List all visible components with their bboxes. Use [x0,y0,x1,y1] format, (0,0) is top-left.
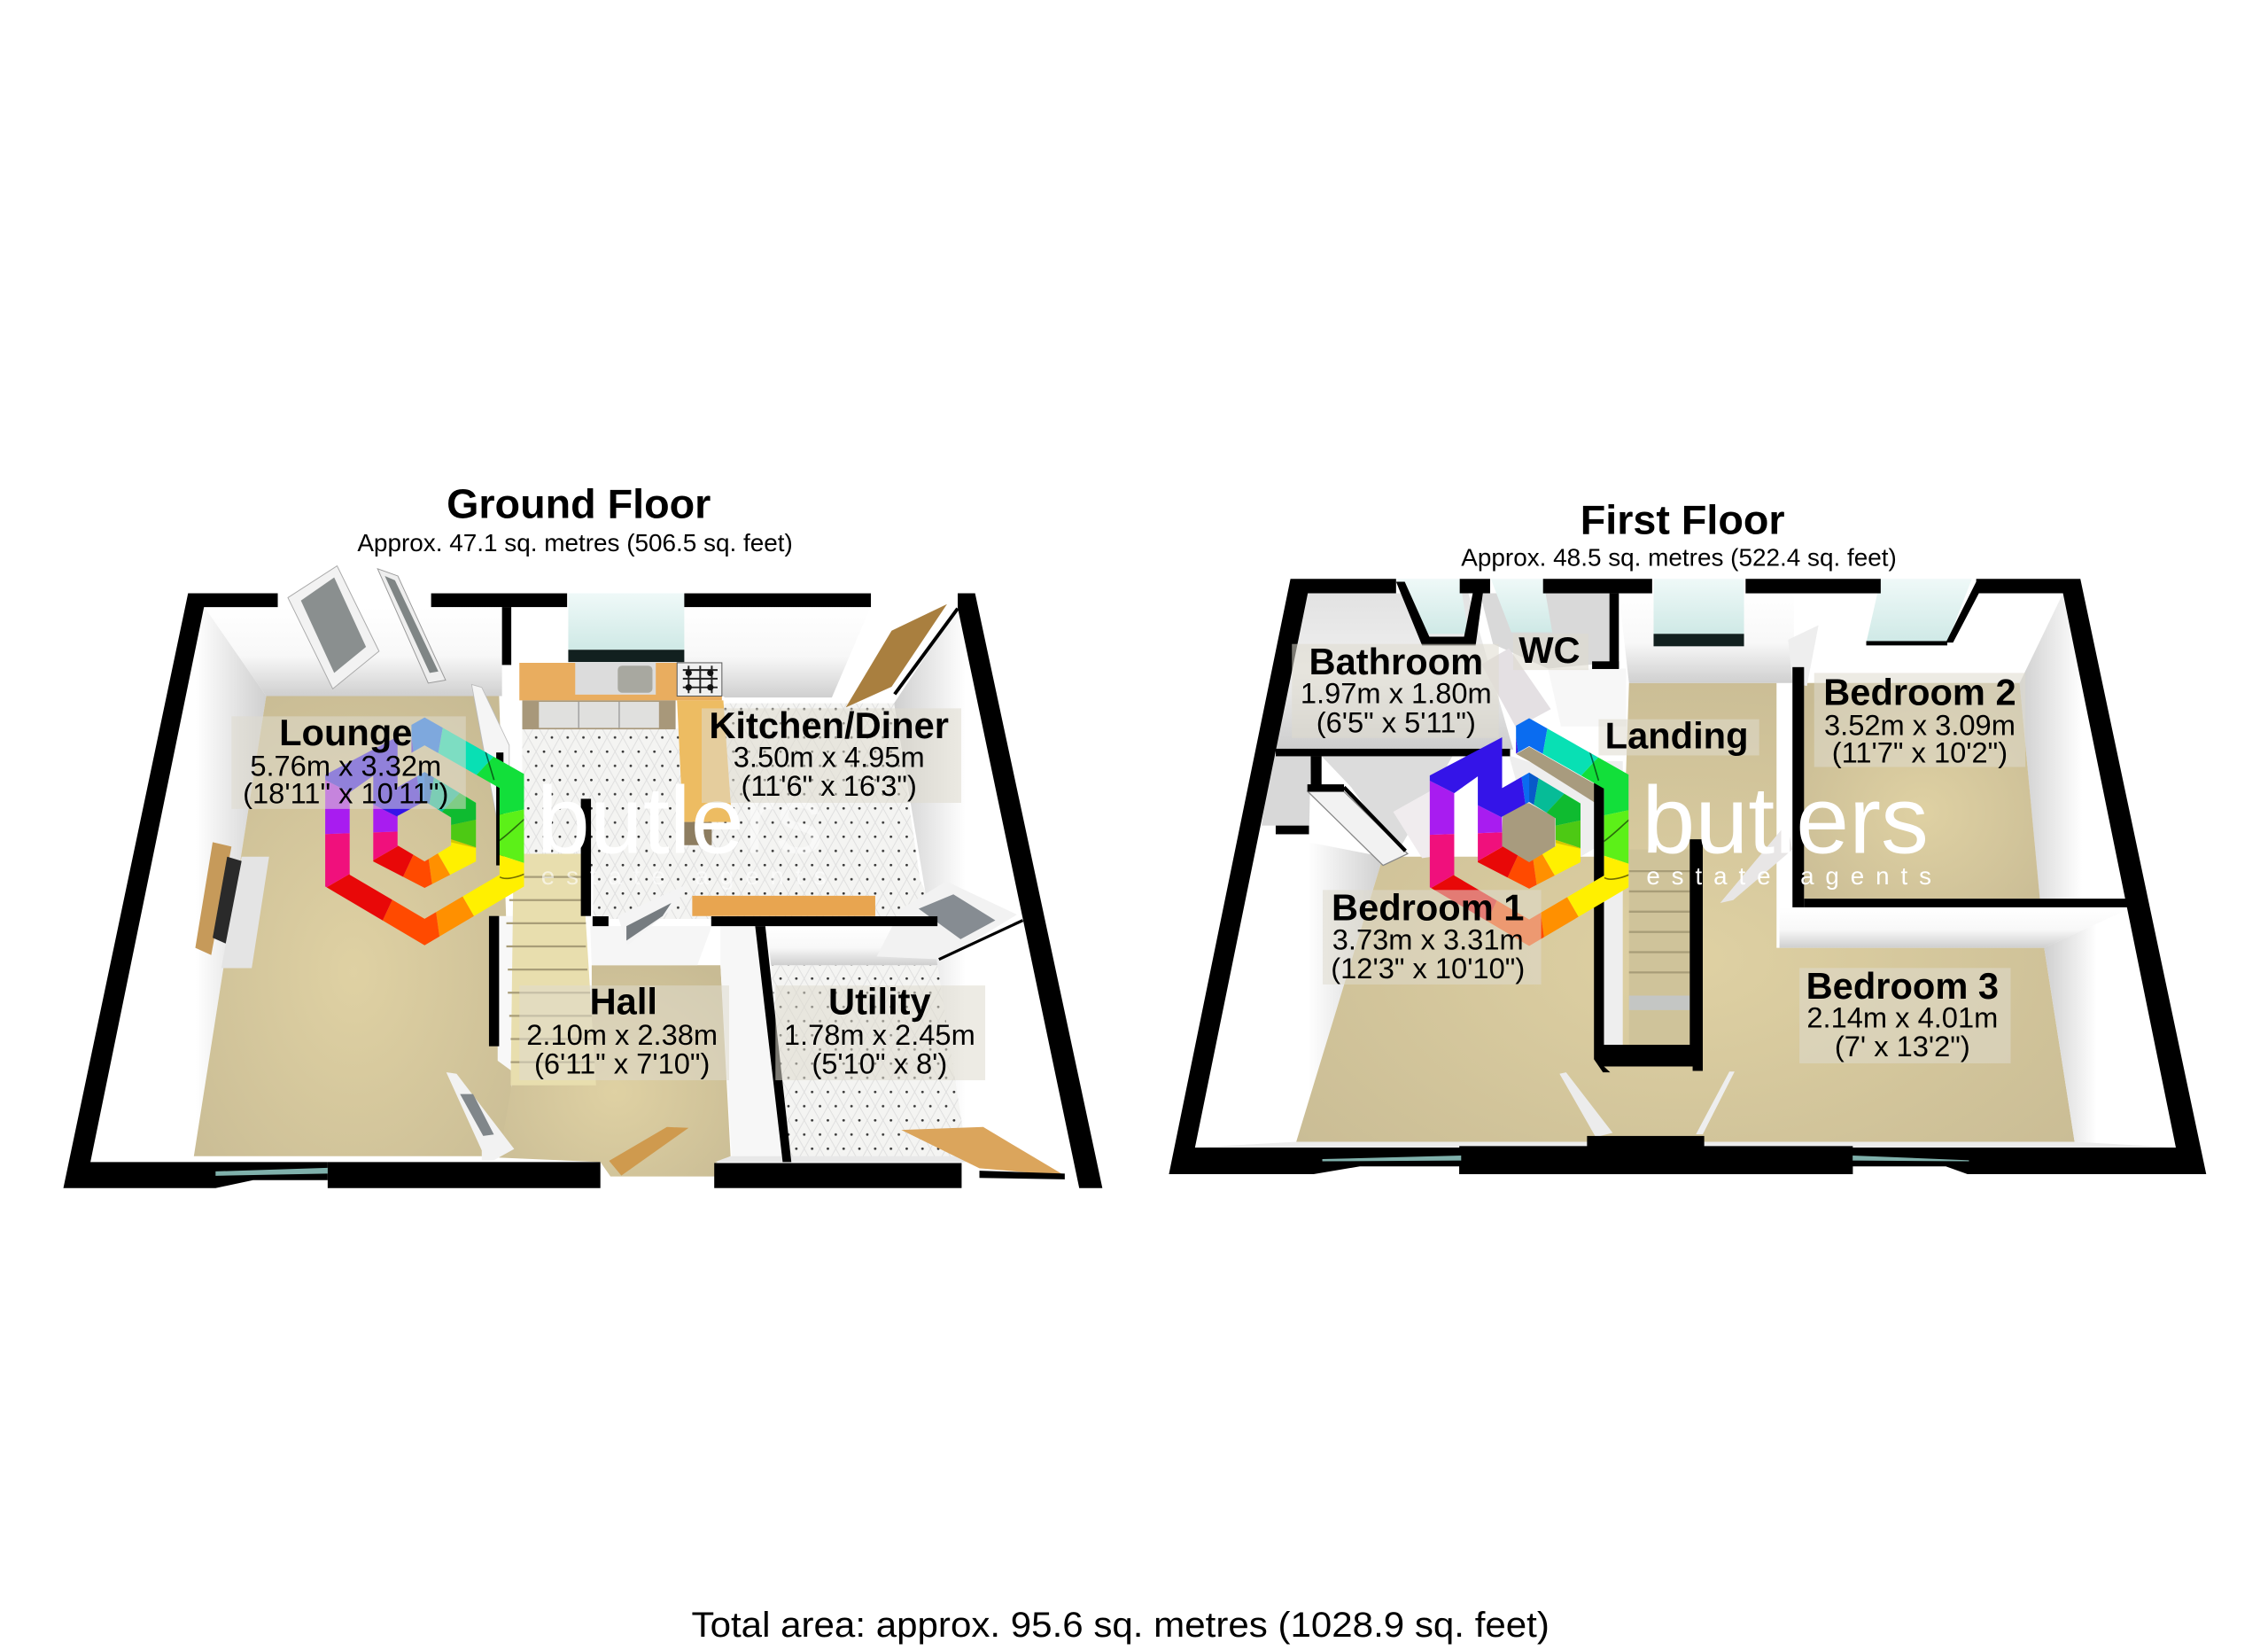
label: Hall [519,981,729,1080]
label: Utility: 1.78m x 2.45m [784,1018,975,1051]
icon: butlers logo ground floor [280,688,566,974]
utility vinyl floor [771,965,967,1161]
hall and utility wall faces [498,608,1074,1162]
title: First Floor: First Floor [1581,497,1785,543]
first floor walls and carpet [1195,594,2176,1148]
label: Bedroom 3: 2.14m x 4.01m [1806,1000,1998,1033]
total area caption: Total area: approx. 95.6 sq. metres (1028.9 sq. feet) [692,1605,1550,1645]
label: Bedroom 2: 3.52m x 3.09m [1824,709,2016,742]
label: Bedroom 1: Bedroom 1 [1332,887,1524,929]
butlers wordmark first floor: butlers [1642,767,1929,874]
label: Lounge [231,712,466,809]
label: Bathroom: 1.97m x 1.80m [1301,677,1492,710]
label: Bedroom 3: (7' x 13'2") [1835,1030,1970,1062]
title: Ground Floor: Ground Floor [447,481,711,527]
wc room [1480,594,1610,668]
label: WC: WC [1518,629,1581,671]
kitchen back wall [677,606,871,697]
label: Bedroom 3 [1799,965,2010,1063]
label: Hall: Hall [590,981,657,1023]
stair well [1604,761,1690,1066]
subtitle: ground floor area: Approx. 47.1 sq. metres (506.5 sq. feet) [357,529,793,556]
label: Kitchen/Diner: Kitchen/Diner [709,704,949,746]
bathroom tiles [1271,594,1513,750]
label: Bathroom [1292,641,1499,738]
label: Kitchen/Diner: 3.50m x 4.95m [734,741,925,774]
label: Kitchen/Diner: (11'6" x 16'3") [742,769,917,802]
butlers wordmark ground floor: butlers [537,767,823,874]
stairs [507,853,596,1086]
label: Bedroom 2: (11'7" x 10'2") [1832,736,2008,769]
label: Landing: Landing [1605,714,1749,756]
panel: ground floor plan [64,566,1102,1188]
label: Bedroom 2 [1814,671,2025,769]
panel: first floor plan [1169,579,2206,1174]
patio doors [288,566,446,689]
lounge window glass [215,1168,328,1176]
kitchen window [568,594,684,650]
label: Utility [775,981,985,1080]
internal doors [447,684,1017,1161]
label: Kitchen/Diner [702,704,961,803]
landing doors to front [1559,1071,1735,1137]
windows [1396,579,1972,642]
label: Utility: (5'10" x 8') [812,1047,947,1080]
label: Bedroom 2: Bedroom 2 [1823,671,2016,712]
lounge carpet and walls [90,606,514,1162]
hall carpet [499,965,731,1177]
butlers wordmark first floor: estate agents [1646,862,1931,890]
label: Bedroom 3: Bedroom 3 [1806,965,1999,1007]
fireplace [195,842,269,969]
wooden doors [609,604,1065,1176]
label: Hall: (6'11" x 7'10") [534,1047,710,1080]
butlers wordmark ground floor: estate agents [541,862,826,890]
label: Utility: Utility [828,981,931,1023]
icon: butlers logo first floor [1385,689,1671,975]
label: Bathroom: Bathroom [1309,641,1483,682]
label: Bedroom 1: (12'3" x 10'10") [1331,952,1525,985]
bathroom and bedroom doors [1481,625,1819,903]
subtitle: first floor area: Approx. 48.5 sq. metres (522.4 sq. feet) [1461,544,1897,572]
kitchen worktops, sink, hob, cupboards [519,663,875,916]
ground floor black walls [64,594,1102,1188]
label: Lounge: 5.76m x 3.32m [250,749,441,782]
label: Bedroom 1: 3.73m x 3.31m [1332,922,1524,955]
label: Lounge: Lounge [279,712,412,753]
front window glass [1323,1156,1969,1162]
kitchen vinyl floor [523,704,937,919]
label: Hall: 2.10m x 2.38m [526,1018,718,1051]
label: Bedroom 1 [1323,887,1542,985]
label: Bathroom: (6'5" x 5'11") [1317,705,1476,738]
wardrobes and cupboards [1262,747,1603,878]
label: Lounge: (18'11" x 10'11") [243,776,448,809]
first floor black walls [1169,579,2206,1174]
